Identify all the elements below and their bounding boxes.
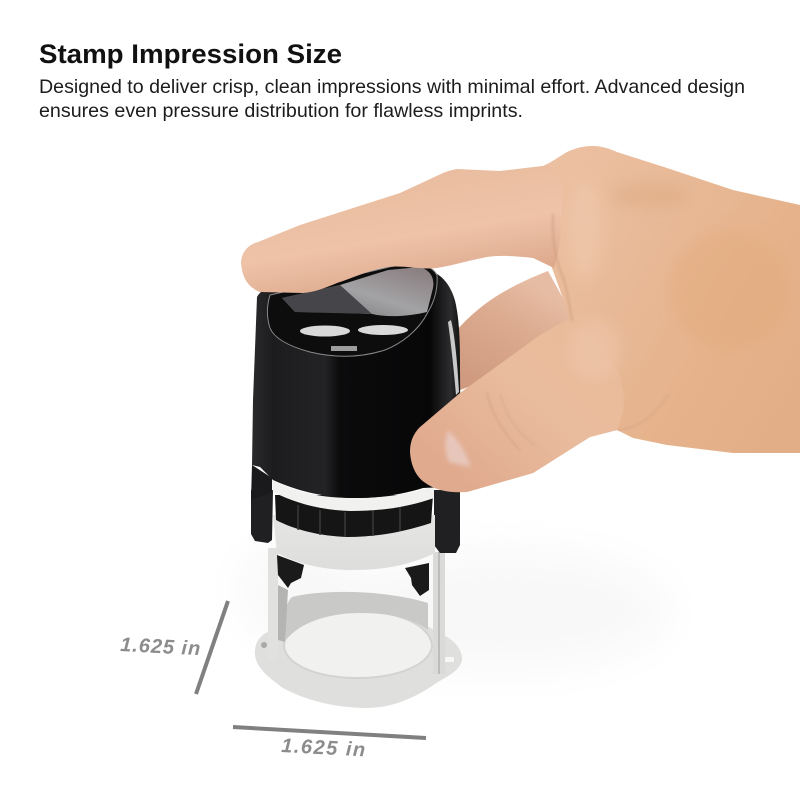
- description text: [39, 76, 745, 122]
- stamp support posts: [268, 548, 445, 674]
- hand: middle finger behind stamp: [455, 271, 575, 392]
- stamp black side legs: [251, 490, 460, 553]
- dimension: width line: [233, 727, 426, 738]
- skin tone patches: [567, 180, 790, 380]
- knuckle creases: [487, 215, 668, 450]
- dimension: height line: [196, 601, 228, 694]
- description text: ensures even pressure distribution for flawless imprints.: [39, 100, 523, 122]
- dimension: width label: 1.625 in: [281, 735, 366, 761]
- title: Stamp Impression Size: [39, 39, 342, 69]
- black stamp cap: [251, 264, 461, 500]
- soft ground shadow: [240, 540, 670, 670]
- window label reflection: [282, 267, 433, 316]
- glossy highlights: [300, 325, 408, 351]
- base back wall: [285, 592, 428, 640]
- translucent top window: [267, 264, 437, 356]
- back of hand: [460, 146, 800, 492]
- base opening floor: [284, 611, 432, 678]
- stamp base plate: [255, 592, 462, 708]
- index finger: [241, 166, 562, 293]
- black dial wheel: [275, 495, 433, 537]
- dimension: height label: 1.625 in: [120, 634, 201, 660]
- hand: [241, 146, 800, 492]
- description text: Designed to deliver crisp, clean impressions with minimal effort. Advanced design: [39, 76, 745, 98]
- black mechanism clips: [277, 555, 429, 596]
- white collar: [272, 480, 434, 511]
- stamp: [251, 264, 462, 708]
- grey frame band: [273, 515, 435, 570]
- thumb: [410, 320, 624, 492]
- thumb nail: [446, 430, 471, 467]
